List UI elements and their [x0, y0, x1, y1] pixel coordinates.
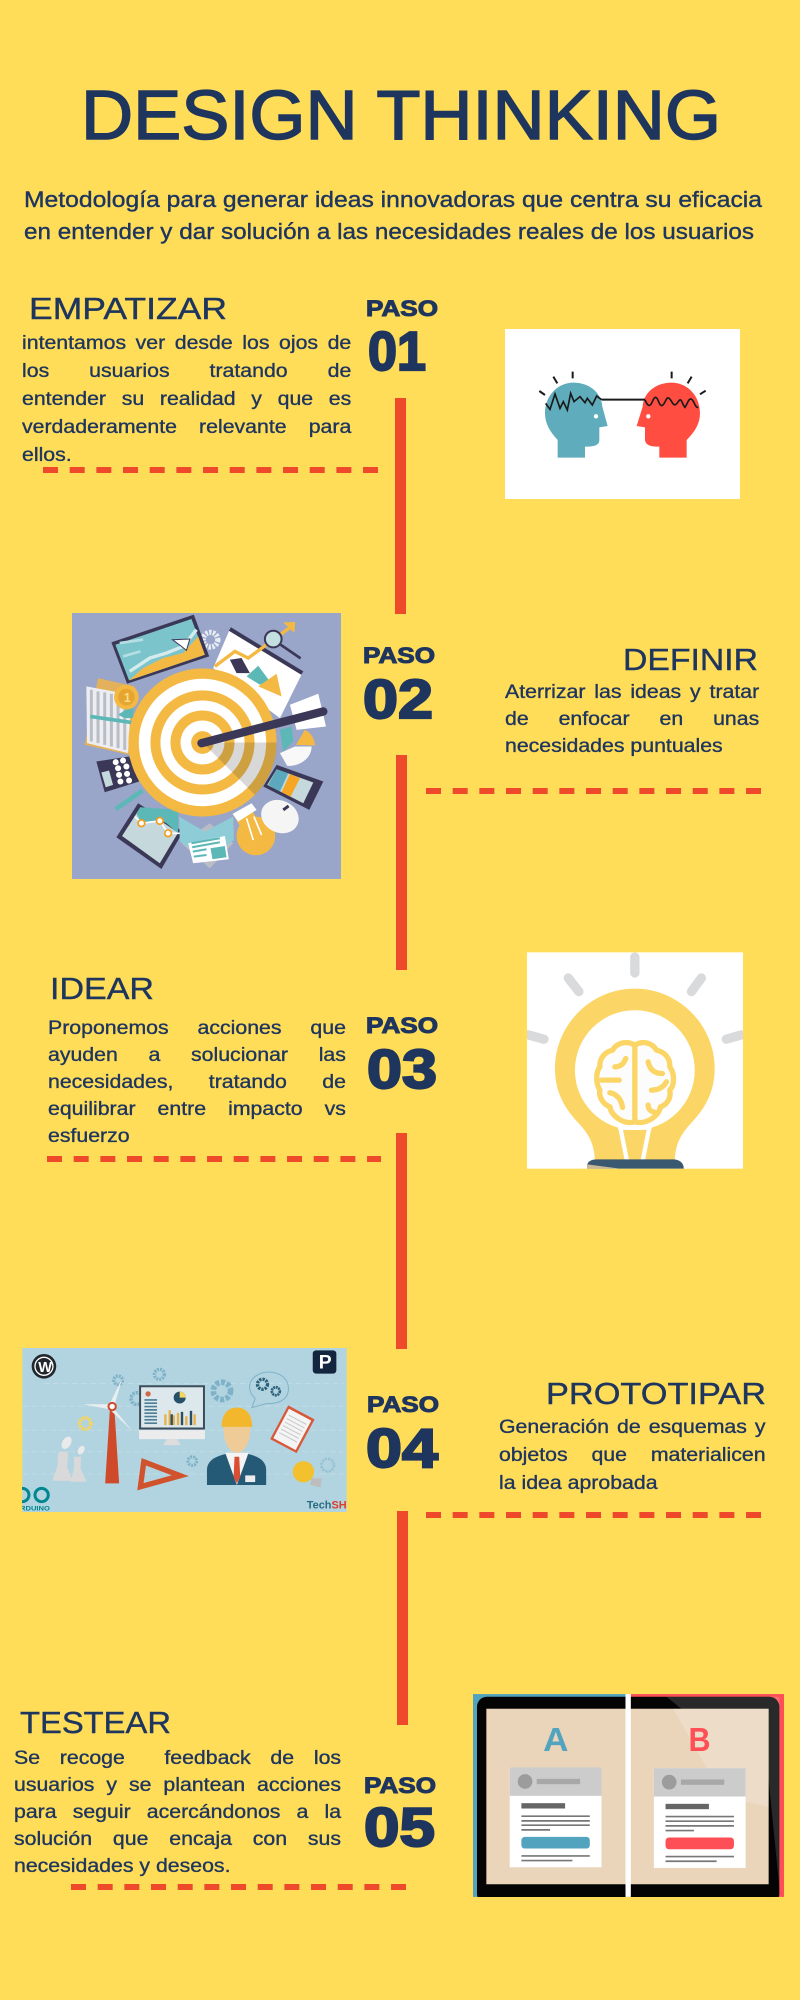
timeline bar 3	[396, 1133, 407, 1349]
image: A/B test on laptop	[473, 1694, 784, 1897]
step 5 label	[364, 1773, 436, 1858]
icon: report book	[85, 678, 135, 755]
step 2 label: 02	[363, 668, 433, 730]
step 3 text: ayuden a solucionar las	[48, 1045, 346, 1066]
icon: gear	[203, 632, 218, 647]
subtitle: en entender y dar solución a las necesidades reales de los usuarios	[24, 219, 754, 244]
step 5 label: 05	[364, 1796, 435, 1858]
step 2 text	[504, 682, 760, 757]
icon: arduino logo	[16, 1488, 50, 1512]
image: light bulb with brain	[527, 952, 743, 1169]
dashed connector 3	[47, 1156, 381, 1162]
version B	[654, 1722, 746, 1868]
icon: engineer	[207, 1408, 266, 1485]
step 3 text: equilibrar entre impacto vs	[48, 1099, 346, 1120]
step 3 heading: IDEAR	[50, 971, 154, 1006]
icon: bulb	[555, 989, 715, 1163]
icon: wordpress logo: W	[38, 1360, 52, 1376]
step 3 label	[366, 1013, 438, 1100]
step 2 text: necesidades puntuales	[505, 736, 723, 757]
dashed connector 5	[71, 1884, 406, 1890]
step 2 label: PASO	[363, 643, 435, 668]
icon: speech bubble gears	[250, 1372, 288, 1408]
timeline bar 2	[396, 755, 407, 970]
step 4 heading: PROTOTIPAR	[546, 1376, 766, 1411]
dashed connector 2	[426, 788, 761, 794]
step 3 text	[48, 1018, 346, 1147]
dashed connector 4	[426, 1512, 761, 1518]
step 5 text: Se recoge feedback de los	[14, 1748, 341, 1769]
step 1 heading: EMPATIZAR	[29, 291, 227, 326]
icon: growth board	[213, 622, 302, 718]
icon: computer monitor	[139, 1385, 205, 1445]
icon: wind turbine	[83, 1379, 132, 1483]
step 5 text	[14, 1748, 342, 1877]
title: DESIGN THINKING	[81, 76, 721, 154]
step 1 label: PASO	[366, 296, 438, 321]
step 3 label: 03	[367, 1038, 437, 1100]
step 1 text: los usuarios tratando de	[22, 361, 351, 382]
icon: wordpress logo	[32, 1354, 56, 1379]
step 4 text: la idea aprobada	[499, 1473, 658, 1494]
step 4 label: PASO	[367, 1392, 439, 1417]
timeline bar 4	[397, 1511, 408, 1725]
icon: pencil	[116, 791, 142, 809]
step 5 text: para seguir acercándonos a la	[14, 1802, 341, 1823]
icon: power plant	[52, 1435, 87, 1482]
icon: medal: 1	[124, 691, 131, 705]
icon: filament	[618, 1127, 651, 1162]
step 4 text: Generación de esquemas y	[499, 1417, 766, 1438]
icon: techshop logo: TechSH	[307, 1499, 347, 1511]
timeline bar 1	[395, 398, 406, 614]
icon: envelope and newspaper	[179, 817, 234, 868]
step 5 label: PASO	[364, 1773, 436, 1798]
step 5 text: necesidades y deseos.	[14, 1856, 230, 1877]
step 2 text: de enfocar en unas	[505, 709, 759, 730]
icon: light bulb	[233, 803, 275, 855]
dashed connector 1	[43, 467, 378, 473]
version A	[510, 1722, 601, 1867]
subtitle	[24, 187, 763, 244]
step 5 text: usuarios y se plantean acciones	[14, 1775, 341, 1796]
icon: medal	[114, 685, 139, 718]
icon: blue head	[545, 383, 608, 458]
step 1 text: intentamos ver desde los ojos de	[22, 333, 351, 354]
image: prototyping engineer scene	[22, 1348, 347, 1512]
icon: P logo: P	[319, 1353, 332, 1374]
step 3 text: necesidades, tratando de	[48, 1072, 346, 1093]
step 1 label	[366, 296, 438, 382]
step 4 label	[366, 1392, 439, 1479]
icon: bulb base	[587, 1159, 684, 1169]
icon: rays	[528, 957, 741, 1039]
step 3 label: PASO	[366, 1013, 438, 1038]
target	[128, 668, 277, 817]
icon: calculator	[96, 757, 139, 792]
step 1 text: ellos.	[22, 445, 72, 466]
step 4 text: objetos que materialicen	[499, 1445, 766, 1466]
step 2 label	[363, 643, 435, 730]
step 5 heading: TESTEAR	[20, 1705, 171, 1740]
step 2 text: Aterrizar las ideas y tratar	[505, 682, 759, 703]
icon: tablet chart	[116, 803, 183, 869]
step 1 label: 01	[368, 320, 426, 382]
connection line and brain waves	[539, 372, 706, 410]
icon: smartphone	[263, 765, 323, 810]
icon: small bulb	[293, 1461, 322, 1487]
step 1 text: verdaderamente relevante para	[22, 417, 351, 438]
icon: arrow in target	[201, 694, 326, 743]
icon: pie chart	[280, 726, 315, 766]
step 4 label: 04	[366, 1417, 438, 1479]
step 2 heading: DEFINIR	[623, 642, 758, 677]
step 3 text: esfuerzo	[48, 1126, 130, 1147]
icon: P logo	[313, 1350, 336, 1374]
step 4 text	[499, 1417, 766, 1494]
image: two heads connected	[505, 329, 740, 499]
icon: red head	[637, 383, 700, 458]
step 3 text: Proponemos acciones que	[48, 1018, 346, 1039]
version A: A	[543, 1722, 568, 1759]
step 1 text	[22, 333, 352, 466]
subtitle: Metodología para generar ideas innovadoras que centra su eficacia	[24, 187, 763, 212]
icon: monitor chart	[111, 615, 209, 684]
icon: clipboard	[270, 1405, 315, 1453]
step 1 text: entender su realidad y que es	[22, 389, 351, 410]
icon: set square	[140, 1462, 180, 1487]
icon: mouse	[256, 794, 304, 839]
icon: brain	[597, 1043, 674, 1122]
image: target and business icons	[72, 613, 341, 879]
version B: B	[689, 1722, 711, 1759]
icon: gears	[114, 1369, 334, 1471]
step 5 text: solución que encaja con sus	[14, 1829, 341, 1850]
